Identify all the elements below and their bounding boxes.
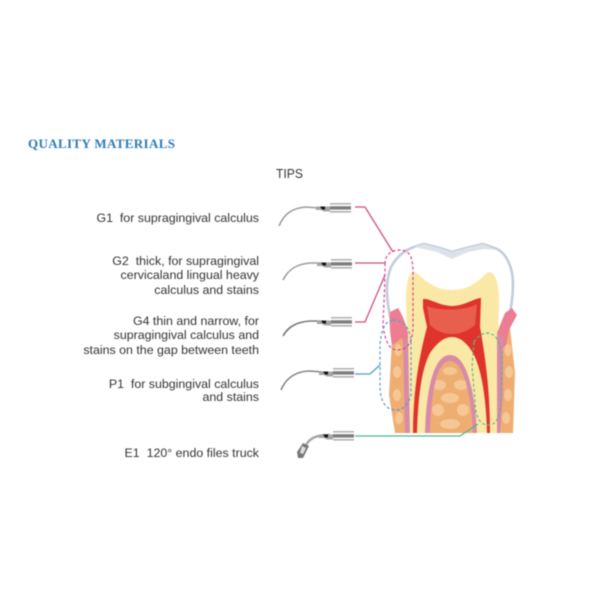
label: P1: P1 for subgingival calculus (109, 377, 259, 391)
label: G2 (112, 254, 260, 297)
label: P1: and stains (203, 390, 259, 404)
periodontal stripes (403, 338, 410, 433)
label: G4: stains on the gap between teeth (83, 343, 259, 357)
connector: E1 (355, 424, 478, 436)
central bone (428, 356, 475, 433)
label: G4: G4 thin and narrow, for (133, 314, 259, 328)
label: G4 (83, 314, 259, 357)
icon: G4 tip (283, 317, 352, 336)
connector: G2 (355, 262, 385, 264)
pulp (413, 298, 490, 433)
magenta dashed loop (383, 250, 413, 350)
right bone (498, 328, 515, 433)
label: G2: calculus and stains (154, 283, 259, 297)
label: E1: E1 120° endo files truck (125, 446, 260, 460)
icon: E1 tip (297, 431, 354, 458)
label: G4: supragingival calculus and (114, 328, 259, 342)
illustration: tooth cross-section (380, 244, 517, 433)
label: G1: G1 for supragingival calculus (96, 211, 259, 225)
connector: G1 (355, 207, 393, 252)
label: G2: G2 thick, for supragingival (112, 254, 259, 268)
enamel fissure (414, 244, 497, 259)
bone texture (393, 344, 513, 429)
right gum (497, 308, 517, 350)
icon: G2 tip (283, 259, 352, 280)
pulp chamber highlight (427, 304, 477, 334)
icon: G1 tip (279, 203, 351, 226)
left gum (390, 308, 408, 350)
label: G2: cervicaland lingual heavy (121, 268, 260, 282)
green dashed loop (472, 333, 502, 425)
left bone (389, 335, 408, 433)
connector: P1 (355, 365, 380, 374)
connector: G4 (355, 275, 385, 322)
dentin (406, 272, 499, 433)
blue dashed loop (380, 320, 411, 410)
enamel crown (387, 244, 513, 345)
title: QUALITY MATERIALS (28, 136, 175, 151)
label: P1 (109, 377, 259, 404)
icon: P1 tip (281, 368, 354, 390)
heading: tips: TIPS (276, 166, 303, 181)
